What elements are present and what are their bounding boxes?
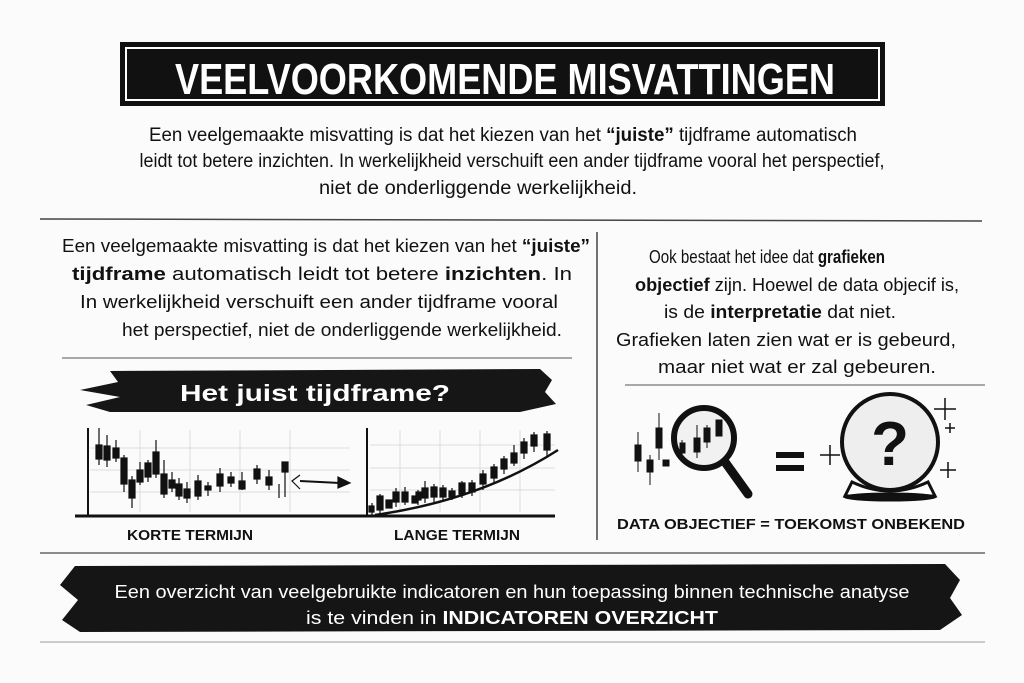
right text block: is de interpretatie dat niet.	[664, 301, 896, 322]
intro text: leidt tot betere inzichten. In werkelijkheid verschuift een ander tijdframe vooral het perspectief,	[140, 151, 884, 172]
intro text: Een veelgemaakte misvatting is dat het kiezen van het “juiste” tijdframe automatisch	[149, 125, 857, 146]
right text block: Ook bestaat het idee dat grafieken	[649, 246, 885, 267]
right text block: objectief zijn. Hoewel de data objecif is,	[635, 274, 959, 295]
intro text	[140, 125, 884, 199]
left text block: tijdframe automatisch leidt tot betere inzichten . In	[72, 263, 572, 284]
right text block	[616, 246, 959, 377]
bottom banner: is te vinden in INDICATOREN OVERZICHT	[306, 608, 718, 628]
left text block	[62, 235, 590, 340]
left text block: Een veelgemaakte misvatting is dat het kiezen van het “juiste”	[62, 235, 590, 256]
banner: het juist tijdframe: Het juist tijdframe?	[180, 380, 450, 406]
label: lange termijn: LANGE TERMIJN	[394, 528, 520, 544]
left text block: het perspectief, niet de onderliggende werkelijkheid.	[122, 319, 562, 340]
icon: equals	[776, 452, 804, 471]
intro text: niet de onderliggende werkelijkheid.	[319, 178, 637, 199]
left text block: In werkelijkheid verschuift een ander tijdframe vooral	[80, 291, 558, 312]
label: data objectief = toekomst onbekend: DATA OBJECTIEF = TOEKOMST ONBEKEND	[617, 516, 965, 533]
bottom banner	[60, 564, 962, 632]
right text block: Grafieken laten zien wat er is gebeurd,	[616, 329, 956, 350]
chart: lange termijn	[355, 428, 558, 516]
chart: korte termijn	[75, 428, 355, 516]
icon: magnifier with candles	[635, 408, 748, 494]
icon: crystal ball	[820, 394, 956, 501]
banner: het juist tijdframe	[80, 369, 556, 412]
label: korte termijn: KORTE TERMIJN	[127, 528, 253, 544]
title: VEELVOORKOMENDE MISVATTINGEN	[175, 55, 835, 104]
right text block: maar niet wat er zal gebeuren.	[658, 356, 936, 377]
bottom banner: Een overzicht van veelgebruikte indicatoren en hun toepassing binnen technische anatyse	[114, 582, 910, 602]
icon: crystal ball: ?	[871, 410, 909, 479]
title	[120, 42, 885, 106]
